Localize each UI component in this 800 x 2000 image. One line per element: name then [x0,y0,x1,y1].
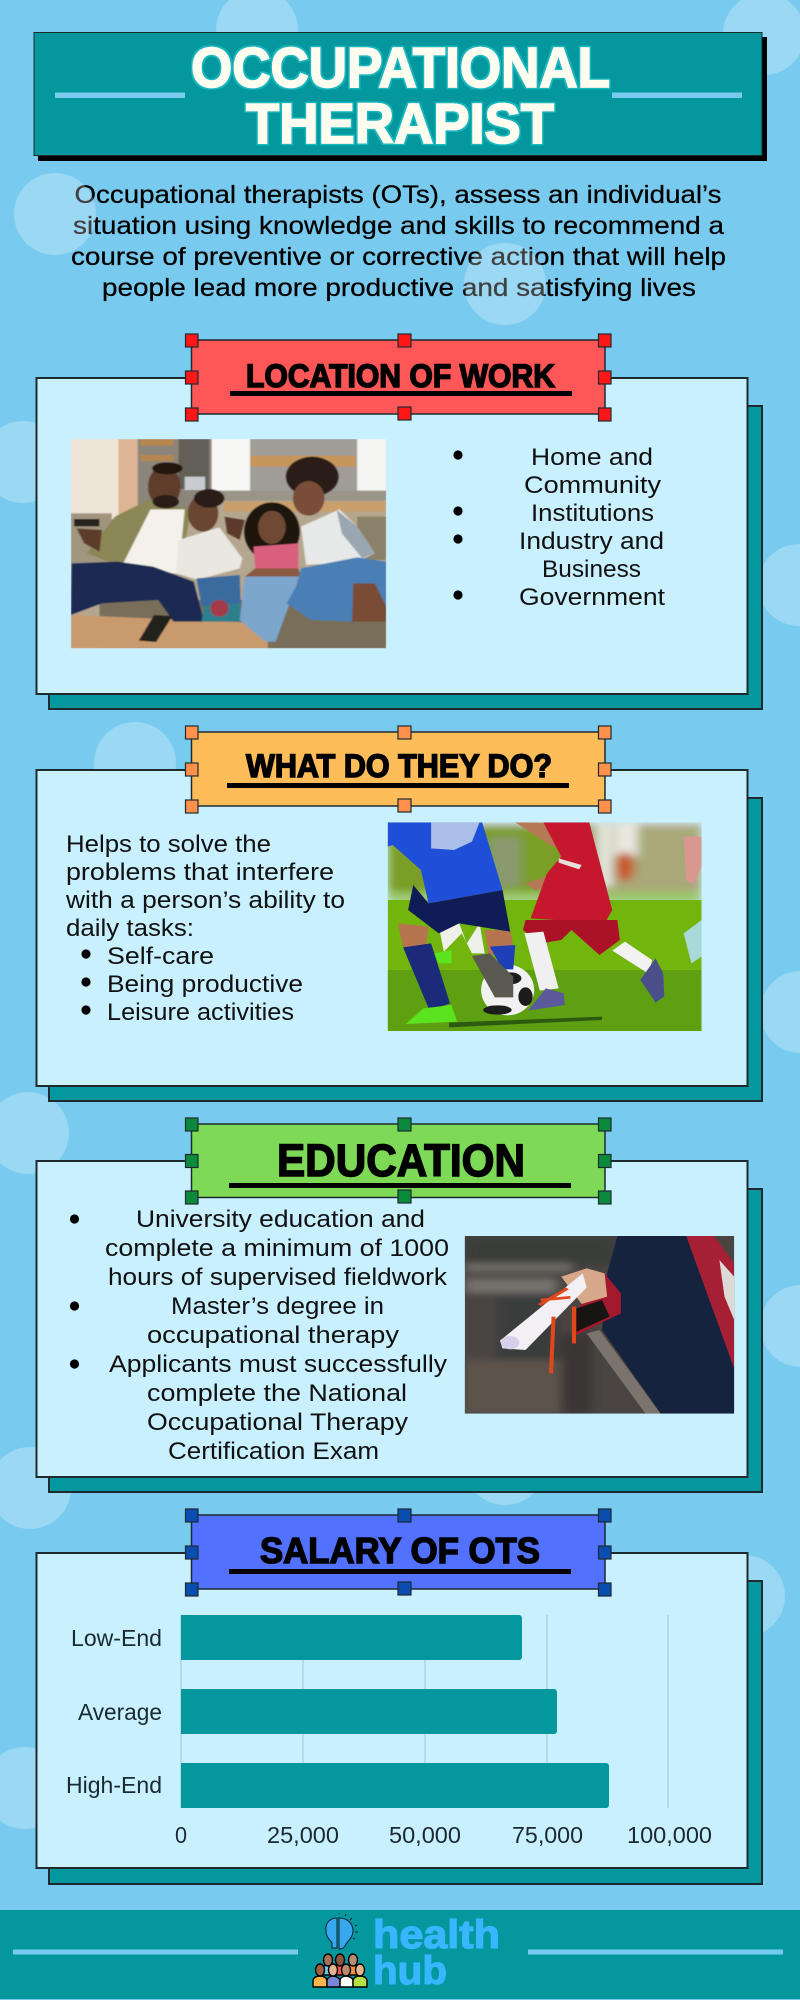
list: work locations [453,444,665,611]
logo wordmark: hub [373,1949,447,1993]
bar chart: salary ranges [66,1615,712,1848]
heading bar: location of work [186,334,611,421]
heading bar: location of work: LOCATION OF WORK [246,358,555,394]
list: education requirements: occupational therapy [147,1322,399,1349]
heading bar: education: EDUCATION [277,1135,525,1186]
category labels: Low-End [71,1625,162,1651]
icon: group of people [313,1954,367,1987]
list: work locations: Home and [531,444,653,471]
list: education requirements: Certification Exam [168,1438,379,1465]
text: duties: Being productive [107,971,303,998]
text: duties: Leisure activities [107,999,294,1026]
title text: THERAPIST [246,92,554,156]
panel: what do they do [36,726,762,1101]
list: work locations: Government [519,584,665,611]
list: education requirements: Master’s degree in [171,1293,384,1320]
intro paragraph: situation using knowledge and skills to recommend a [73,212,724,240]
bars [181,1615,609,1808]
category labels: Average [78,1699,162,1725]
axis values: 0 [175,1822,187,1848]
axis values [175,1822,712,1848]
intro paragraph: Occupational therapists (OTs), assess an individual’s [74,181,722,209]
photo: soccer players [388,822,702,1031]
text: duties [65,831,345,1026]
footer band [0,1910,800,1999]
title text: OCCUPATIONAL [191,36,610,100]
list: education requirements: Occupational Therapy [147,1409,408,1436]
category labels: High-End [66,1772,162,1798]
axis values: 50,000 [389,1822,461,1848]
heading bar: what do they do: WHAT DO THEY DO? [246,748,552,784]
photo: family on sofa [71,439,386,648]
text: duties: daily tasks: [66,915,194,942]
heading bar: education [186,1118,611,1204]
category labels [66,1625,162,1798]
axis values: 75,000 [512,1822,583,1848]
photo: graduate holding diploma [465,1236,734,1414]
icon: brain light bulb [326,1913,358,1949]
panel: salary of OTs [36,1509,762,1884]
heading bar: salary: SALARY OF OTS [260,1530,540,1571]
axis values: 25,000 [267,1822,339,1848]
list: education requirements: University education and [136,1206,425,1233]
intro paragraph: course of preventive or corrective action that will help [71,243,726,271]
list: work locations: Community [524,472,661,499]
text: duties: problems that interfere [66,859,334,886]
list: work locations: Institutions [531,500,654,527]
list: work locations: Industry and [519,528,664,555]
text: duties: Self-care [107,943,214,970]
intro paragraph: people lead more productive and satisfying lives [102,274,696,302]
panel: location of work [36,334,762,709]
title banner [34,32,767,161]
heading bar: what do they do [186,726,611,813]
panel: education [36,1118,762,1492]
title text [191,36,610,156]
heading bar: salary [186,1509,611,1596]
text: duties: with a person’s ability to [65,887,345,914]
logo wordmark: health [373,1913,500,1957]
list: education requirements: complete a minimum of 1000 [105,1235,449,1262]
axis values: 100,000 [627,1822,712,1848]
list: education requirements: hours of supervised fieldwork [108,1264,448,1291]
logo wordmark [373,1913,500,1993]
list: education requirements: complete the National [147,1380,407,1407]
list: work locations: Business [542,556,641,583]
intro paragraph [71,181,726,302]
text: duties: Helps to solve the [66,831,271,858]
list: education requirements: Applicants must successfully [109,1351,447,1378]
list: education requirements [70,1206,449,1465]
